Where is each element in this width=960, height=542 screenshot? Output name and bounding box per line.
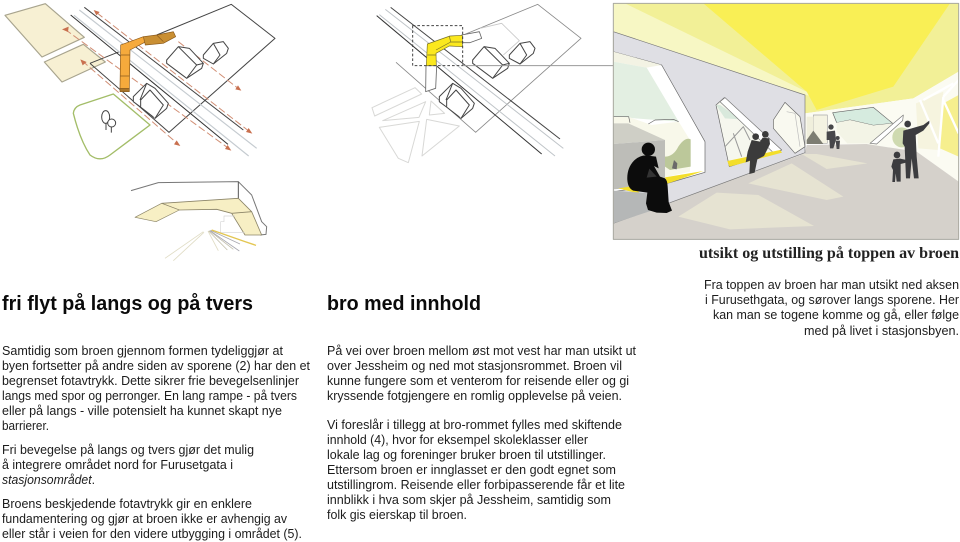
left text block 1: barrierer. (2, 419, 49, 433)
perspective: interior of the bridge (613, 3, 959, 239)
site axonometric: highlighted bridge section (372, 4, 615, 163)
left text block 1: Samtidig som broen gjennom formen tydeliggjør at (2, 344, 283, 358)
site axonometric: movement flows (5, 4, 275, 159)
middle text block 2: folk gis eierskap til broen. (327, 508, 467, 522)
ceiling (613, 3, 959, 113)
right text block: i Furusethgata, og sørover langs sporene. Her (705, 293, 959, 307)
floor (613, 144, 959, 239)
frame (613, 3, 959, 239)
orange bridge (120, 32, 176, 92)
leader line (463, 64, 615, 67)
right text block: kan man se togene komme og gå, eller følge (713, 308, 959, 322)
pointing adult (903, 121, 929, 178)
right text block (704, 278, 959, 338)
sight lines (165, 230, 256, 261)
heading: fri flyt: fri flyt på langs og på tvers (2, 292, 253, 315)
white struts (920, 80, 959, 157)
middle text block 1: kryssende fotgjengere en romlig opplevelse på veien. (327, 389, 622, 403)
middle text block 2 (327, 418, 625, 522)
left text block 3: Broens beskjedende fotavtrykk gir en enklere (2, 497, 252, 511)
middle text block 1: over Jessheim og ned mot stasjonsrommet. Broen vil (327, 359, 622, 373)
left text block 1: begrenset fotavtrykk. Dette sikrer frie bevegelsenlinjer (2, 374, 299, 388)
left text block 2: Fri bevegelse på langs og tvers gjør det mulig (2, 443, 254, 457)
yellow bridge (426, 35, 462, 66)
rail tracks (377, 7, 563, 156)
section sketch of bridge (131, 182, 267, 261)
pale end section (426, 32, 482, 92)
left text block 3: fundamentering og gjør at broen ikke er avhengig av (2, 512, 288, 526)
ghost paths (372, 88, 459, 163)
buildings (439, 42, 535, 118)
tan areas (5, 4, 105, 82)
middle text block 1: kunne fungere som et venterom for reisende eller og gi (327, 374, 629, 388)
left text block 2: stasjonsområdet. (2, 473, 95, 487)
inner plot (480, 23, 519, 55)
far end and right wall (805, 72, 959, 182)
middle text block 2: utstillingrom. Reisende eller forbipasserende får et lite (327, 478, 625, 492)
left text block 1 (2, 344, 310, 433)
middle text block 2: lokale lag og foreninger bruker broen til utstillinger. (327, 448, 606, 462)
middle text block 2: Ettersom broen er innglasset er den godt egnet som (327, 463, 616, 477)
buildings (133, 42, 228, 118)
left text block 1: byen fortsetter på andre siden av sporene (2) har den et (2, 359, 310, 373)
middle text block 1: På vei over broen mellom øst mot vest har man utsikt ut (327, 344, 636, 358)
trees (102, 111, 116, 133)
couple in window (746, 131, 770, 174)
rail tracks (71, 7, 257, 156)
dashed crop box (413, 26, 463, 66)
left text block 3 (2, 497, 302, 541)
left text block 3: eller står i veien for den videre utbygging i området (5). (2, 527, 302, 541)
left text block 2 (2, 443, 254, 487)
heading: utsikt og utstilling: utsikt og utstilling på toppen av broen (699, 245, 959, 262)
middle text block 1 (327, 344, 636, 403)
roof outline (131, 182, 267, 235)
window 3 (773, 102, 805, 153)
heading: bro med innhold: bro med innhold (327, 292, 481, 315)
flow arrows (62, 10, 252, 151)
green park (73, 94, 150, 159)
yellow floor (162, 198, 262, 235)
left text block 1: langs med spor og perronger. En lang rampe - på tvers (2, 389, 297, 403)
window 2 (716, 98, 782, 167)
far figures (827, 124, 840, 149)
right text block: med på livet i stasjonsbyen. (804, 324, 959, 338)
middle text block 2: innhold (4), hvor for eksempel skoleklasser eller (327, 433, 588, 447)
stairs (221, 216, 245, 233)
seated person (627, 143, 672, 213)
sunlight patches (678, 154, 867, 229)
right text block: Fra toppen av broen har man utsikt ned aksen (704, 278, 959, 292)
middle text block 2: innblikk i hva som skjer på Jessheim, samtidig som (327, 493, 611, 507)
bench (613, 123, 665, 223)
middle text block 2: Vi foreslår i tillegg at bro-rommet fylles med skiftende (327, 418, 622, 432)
site outline (396, 4, 581, 132)
left text block 2: å integrere området nord for Furusetgata i (2, 458, 233, 472)
left wall (613, 32, 805, 223)
child (891, 152, 907, 182)
window 1 (613, 52, 705, 192)
left text block 1: eller på langs - ville potensielt ha kunnet skapt nye (2, 404, 282, 418)
far view (833, 107, 893, 125)
site outline (90, 4, 275, 132)
right wall yellow glazing (940, 95, 959, 157)
